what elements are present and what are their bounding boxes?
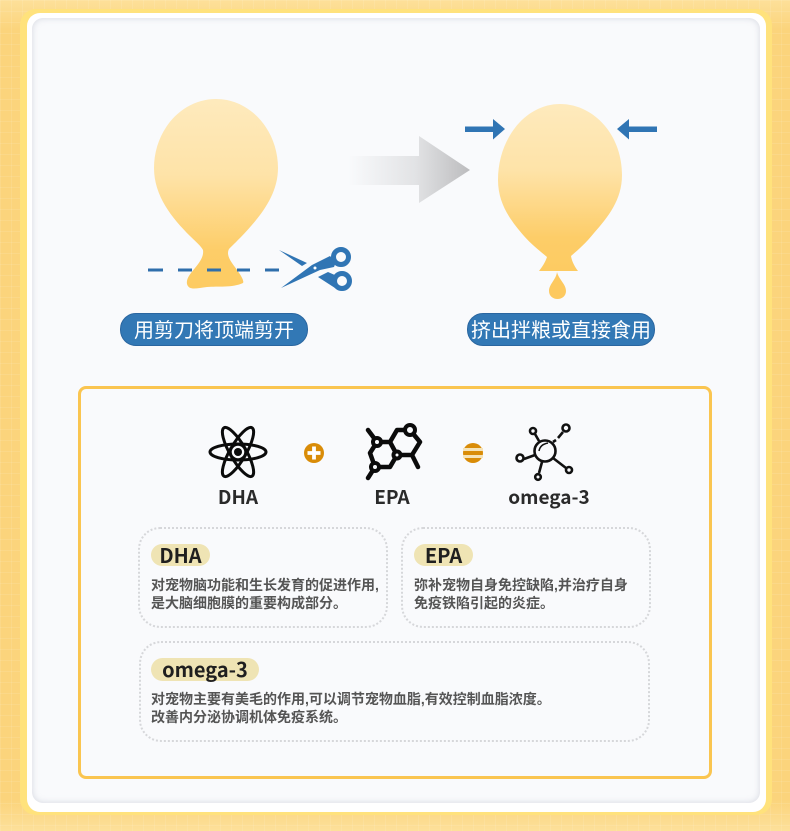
text: omega-3 description: 对宠物主要有美毛的作用,可以调节宠物血脂,有效控制血脂浓度。 [151,691,551,707]
text: omega-3 description [151,691,551,725]
card: EPA [401,527,651,628]
tag: DHA: DHA [159,540,202,569]
label: omega-3: omega-3 [508,483,590,510]
tag: DHA [151,544,210,566]
card: omega-3 [139,641,650,742]
text: EPA description: 弥补宠物自身免控缺陷,并治疗自身 [414,577,628,593]
card: DHA [138,527,388,628]
text: EPA description [414,577,628,611]
tag: EPA: EPA [425,540,462,569]
text: EPA description: 免疫铁陷引起的炎症。 [414,595,554,611]
text: DHA description: 是大脑细胞膜的重要构成部分。 [151,595,347,611]
label: squeeze step: 挤出拌粮或直接食用 [471,314,651,343]
panel: fatty acids [78,386,712,779]
tag: EPA [414,544,473,566]
tag: omega-3: omega-3 [162,654,248,683]
text: DHA description [151,577,379,611]
label: DHA: DHA [218,483,258,510]
label: EPA: EPA [374,483,410,510]
text: DHA description: 对宠物脑功能和生长发育的促进作用, [151,577,379,593]
label: cut step: 用剪刀将顶端剪开 [134,314,294,343]
text: omega-3 description: 改善内分泌协调机体免疫系统。 [151,709,347,725]
tag: omega-3 [151,658,259,681]
